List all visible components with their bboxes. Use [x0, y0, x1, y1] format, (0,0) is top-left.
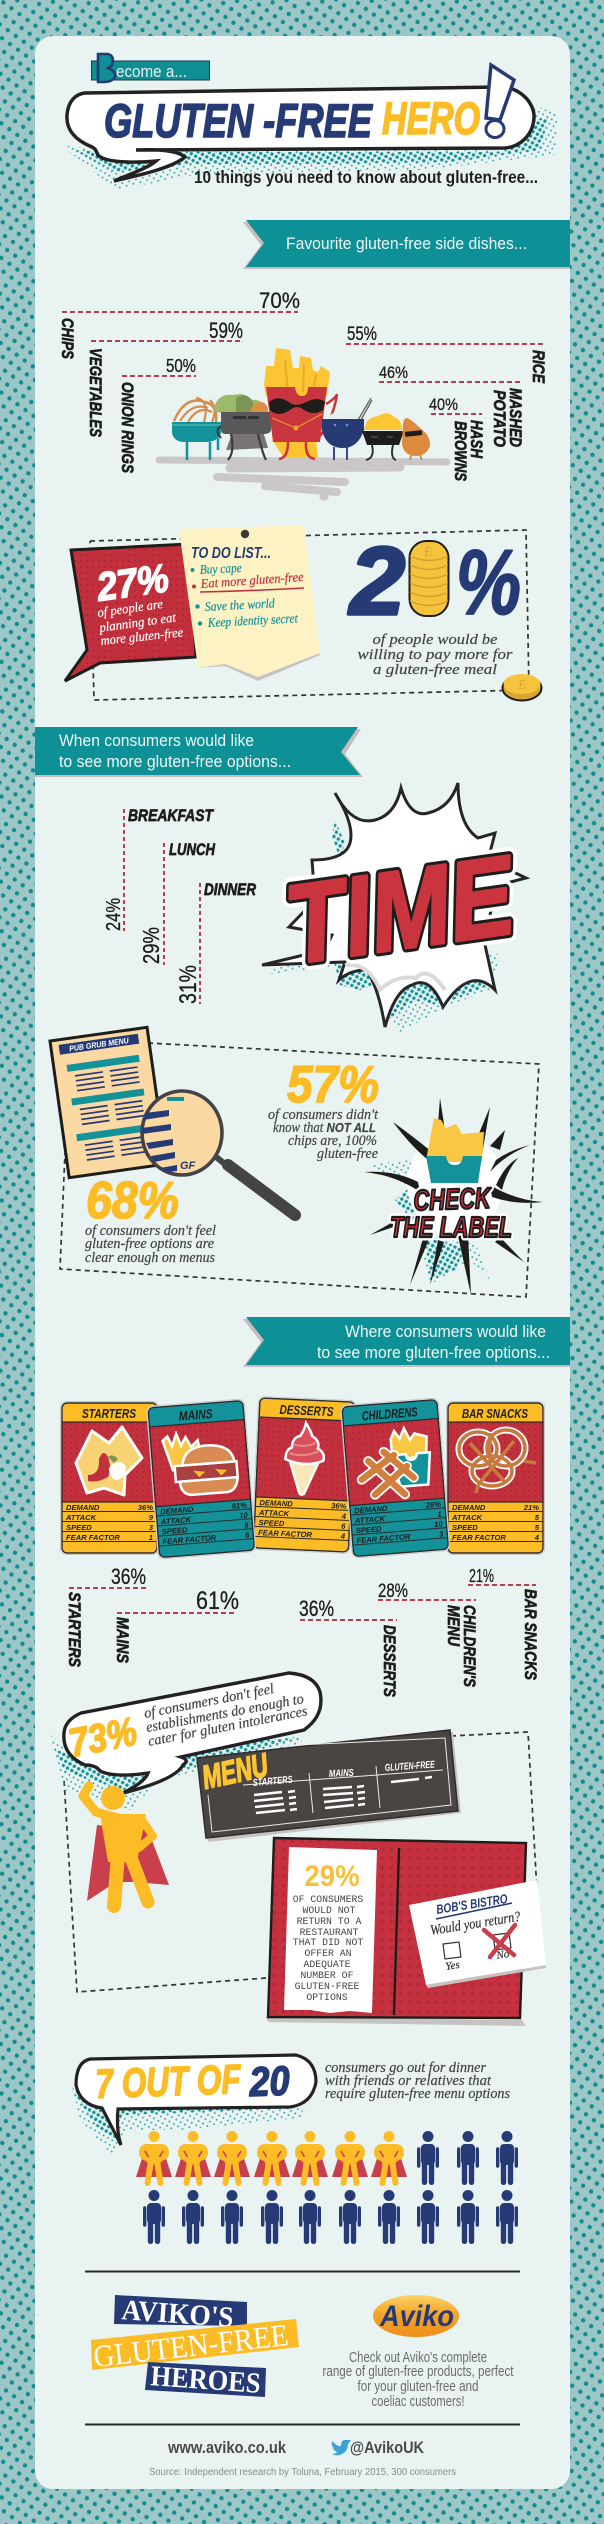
stat: 57 percent: of consumers didn't	[268, 1107, 379, 1123]
header: become a	[92, 54, 210, 82]
card: bar snacks: 21%	[523, 1503, 539, 1512]
card: mains: FEAR FACTOR	[162, 1533, 217, 1546]
chart: restaurant menus right: BAR SNACKS	[521, 1589, 540, 1681]
card: mains: 6	[245, 1530, 250, 1540]
chart: meal times: 29%	[138, 927, 164, 964]
chart: restaurant menus right: DESSERTS	[380, 1625, 399, 1698]
label: check the label: CHECK	[413, 1183, 493, 1217]
label: check the label	[390, 1183, 512, 1244]
comic burst: time	[262, 783, 526, 1032]
card: starters: STARTERS	[82, 1406, 136, 1421]
icon: chips hero character	[264, 348, 337, 459]
ribbon: where consumers: Where consumers would like	[345, 1322, 546, 1341]
27 percent text: more gluten-free	[100, 624, 184, 648]
chart: side dishes right: BROWNS	[451, 421, 470, 482]
chart: restaurant menus left: STARTERS	[65, 1592, 84, 1668]
receipt: WOULD NOT	[303, 1905, 356, 1916]
card: mains: ATTACK	[160, 1515, 192, 1526]
chart: side dishes left: VEGETABLES	[86, 348, 105, 438]
exclamation mark	[486, 65, 514, 138]
chart: restaurant menus left: 61%	[196, 1587, 239, 1615]
chart: side dishes right: 46%	[379, 363, 408, 382]
card: mains: 5	[244, 1520, 250, 1530]
icon: hash brown character	[402, 418, 430, 460]
title text: hero: HERO	[382, 93, 480, 144]
card: childrens: 3	[439, 1529, 444, 1539]
chart: meal times: LUNCH	[169, 840, 216, 859]
card: childrens: 10	[434, 1519, 444, 1529]
text: 20 percent caption	[358, 632, 513, 678]
receipt: OFFER AN	[304, 1948, 352, 1959]
chart: restaurant menus right: 36%	[299, 1596, 334, 1621]
chart: side dishes left: 59%	[209, 318, 243, 343]
twitter handle: @AvikoUK	[350, 2438, 425, 2457]
27 percent text: of people are	[96, 596, 164, 620]
dashed box: menus	[60, 1043, 539, 1297]
chart: meal times: 31%	[175, 965, 202, 1004]
chart: side dishes left: ONION RINGS	[118, 382, 137, 474]
card: starters: ATTACK	[65, 1513, 97, 1522]
icon: magnifying glass	[142, 1091, 295, 1215]
word: TIME: TIME	[278, 832, 524, 988]
card: bar snacks: SPEED	[452, 1523, 478, 1532]
logo: Aviko: Aviko	[379, 2300, 454, 2333]
chalkboard menu: STARTERS	[252, 1775, 293, 1789]
stat: 20 percent with coin stack: %	[456, 532, 521, 634]
chart: meal times: DINNER	[204, 880, 257, 899]
ribbon: when consumers: to see more gluten-free options...	[59, 752, 291, 771]
speech bubble: 7 out of 20: 20	[248, 2058, 290, 2105]
chart: side dishes right: MASHED	[506, 388, 525, 447]
red booklet	[266, 1838, 546, 2026]
comment card: Bob's Bistro: BOB'S BISTRO	[435, 1891, 509, 1917]
chart: side dishes right: HASH	[467, 420, 486, 459]
ribbon: when consumers: When consumers would like	[59, 731, 254, 750]
card: mains	[146, 1399, 256, 1559]
card: bar snacks: 5	[535, 1513, 540, 1522]
ribbon: favourite side dishes: Favourite gluten-free side dishes...	[286, 234, 527, 253]
card: starters: DEMAND	[66, 1503, 100, 1512]
text: Aviko range: coeliac customers!	[372, 2394, 464, 2410]
chart: restaurant menus right	[299, 1566, 540, 1698]
note: to do list: TO DO LIST...	[191, 545, 271, 562]
title text: GLUTEN -FREE	[104, 94, 373, 147]
label: check the label: THE LABEL	[390, 1212, 512, 1244]
stat: 57 percent: 57%	[287, 1056, 379, 1114]
stat: 57 percent	[268, 1056, 379, 1162]
card: childrens: FEAR FACTOR	[356, 1532, 411, 1545]
73 percent text: establishments do enough to	[145, 1691, 305, 1736]
icon: coin stack: £	[424, 543, 432, 559]
icon: rice bowl character	[322, 398, 372, 460]
text: 20 percent caption: of people would be	[372, 632, 498, 648]
chart: side dishes right	[346, 324, 548, 482]
chart: side dishes left: CHIPS	[58, 318, 77, 360]
stat: 68 percent	[85, 1172, 216, 1266]
title speech bubble	[60, 65, 558, 190]
card: desserts: 4	[340, 1532, 346, 1541]
icon: ice cream	[284, 1422, 325, 1495]
icon: twitter bird	[332, 2440, 351, 2455]
receipt: ADEQUATE	[303, 1959, 351, 1970]
card: bar snacks: BAR SNACKS	[462, 1406, 528, 1421]
speech bubble: 7 out of 20: 7 OUT OF	[95, 2056, 242, 2107]
card: starters: 9	[149, 1513, 154, 1522]
chart: side dishes right: 55%	[347, 324, 377, 345]
comic burst: check the label	[364, 1098, 543, 1295]
27 percent text	[96, 596, 184, 648]
source: Source: Independent research by Toluna, February 2015, 300 consumers	[149, 2466, 456, 2478]
dashed box: pay more	[90, 530, 529, 700]
text: 7 out of 20 caption: require gluten-free menu options	[325, 2086, 510, 2102]
27 percent text: planning to eat	[97, 609, 177, 635]
note: to do list: Buy cape	[199, 560, 242, 577]
receipt: GLUTEN-FREE	[295, 1981, 359, 1992]
stat: 68 percent: gluten-free options are	[85, 1236, 215, 1252]
receipt: 29%	[304, 1860, 360, 1893]
chart: side dishes left: 70%	[259, 288, 300, 313]
note: to do list: Keep identity secret	[206, 610, 298, 630]
icon: pub grub menu: PUB GRUB MENU	[69, 1036, 130, 1053]
icon: fries box	[426, 1118, 484, 1183]
logo: Aviko's gluten-free heroes: HEROES	[150, 2360, 262, 2400]
chart: meal times	[103, 806, 257, 1004]
receipt: OPTIONS	[306, 1992, 348, 2003]
card: mains: DEMAND	[160, 1505, 194, 1516]
card: desserts: FEAR FACTOR	[258, 1528, 313, 1539]
card: bar snacks: 4	[534, 1533, 540, 1542]
icon: vegetables character	[214, 394, 271, 460]
card: starters: 36%	[138, 1503, 153, 1512]
chart: side dishes left	[58, 288, 300, 474]
receipt: RETURN TO A	[297, 1916, 361, 1927]
text: Aviko range: for your gluten-free and	[358, 2379, 478, 2395]
ground shadow	[159, 460, 447, 497]
comment card: Bob's Bistro: No	[495, 1948, 511, 1962]
speech bubble: 73 percent	[50, 1673, 321, 1810]
icon: waffle and fries	[358, 1426, 433, 1498]
73 percent text: of consumers don't feel	[143, 1681, 275, 1722]
text: 7 out of 20 caption	[325, 2060, 510, 2102]
text: Aviko range: Check out Aviko's complete	[349, 2350, 487, 2366]
card: desserts: 4	[340, 1512, 347, 1521]
icon: coin stack	[410, 541, 448, 616]
card: childrens: ATTACK	[354, 1514, 386, 1525]
chart: side dishes right: RICE	[529, 350, 548, 384]
text: 7 out of 20 caption: consumers go out for dinner	[325, 2060, 486, 2076]
chart: meal times: BREAKFAST	[128, 806, 214, 825]
ribbon: when consumers	[35, 727, 363, 777]
dashed box: establishments	[64, 1732, 539, 1992]
card: desserts: DEMAND	[259, 1498, 293, 1509]
card: starters: 3	[149, 1523, 154, 1532]
card: childrens: 1	[437, 1510, 442, 1519]
comment card: Bob's Bistro: Yes	[445, 1959, 461, 1973]
icon: nachos	[76, 1427, 142, 1495]
speech bubble: 7 out of 20	[72, 2055, 316, 2155]
73 percent text	[143, 1681, 309, 1750]
card: bar snacks: ATTACK	[451, 1513, 483, 1522]
receipt	[284, 1847, 377, 2013]
stat: 68 percent: of consumers don't feel	[85, 1223, 216, 1239]
card: childrens: DEMAND	[354, 1504, 388, 1515]
chalkboard menu: GLUTEN-FREE	[384, 1760, 435, 1774]
logo: Aviko's gluten-free heroes: AVIKO'S	[121, 2294, 235, 2334]
27 percent number: 27%	[93, 556, 172, 610]
card: desserts: 6	[341, 1522, 346, 1531]
card: starters: FEAR FACTOR	[66, 1533, 120, 1542]
stat: 57 percent: gluten-free	[317, 1146, 379, 1162]
note: to do list	[179, 525, 320, 681]
card: mains: SPEED	[161, 1525, 188, 1536]
receipt: THAT DID NOT	[293, 1937, 363, 1948]
chart: side dishes right: 40%	[429, 395, 458, 414]
chart: restaurant menus right: 28%	[378, 1581, 408, 1602]
73 percent text: cater for gluten intolerances	[147, 1703, 309, 1750]
card: mains: 61%	[231, 1501, 248, 1511]
chart: side dishes left: 50%	[166, 356, 196, 376]
chart: meal times: 24%	[103, 898, 125, 931]
icon: coin	[502, 674, 542, 700]
card: bar snacks: 5	[535, 1523, 540, 1532]
icon: pretzels	[459, 1430, 536, 1493]
card: desserts	[252, 1396, 356, 1554]
label: check the label: CHECK	[413, 1183, 493, 1217]
receipt: NUMBER OF	[301, 1970, 354, 1981]
word: menu: MENU	[199, 1746, 272, 1796]
comment card: Bob's Bistro	[409, 1880, 546, 1988]
subtitle: 10 things you need to know about gluten-free...	[194, 167, 538, 187]
card: desserts: 36%	[331, 1501, 347, 1511]
card: bar snacks: FEAR FACTOR	[452, 1533, 506, 1542]
chalkboard menu: MAINS	[329, 1768, 354, 1780]
pictogram: 7 of 20 people	[136, 2131, 516, 2244]
card: starters: 1	[149, 1533, 153, 1542]
card: bar snacks	[446, 1402, 544, 1554]
card: desserts: ATTACK	[258, 1508, 290, 1518]
chart: restaurant menus right: CHILDREN'S	[460, 1605, 479, 1688]
stat: 68 percent: 68%	[86, 1172, 179, 1230]
note: to do list: Save the world	[204, 595, 276, 614]
card: desserts: DESSERTS	[279, 1402, 334, 1419]
chalkboard menu	[197, 1730, 461, 1842]
comment card: Bob's Bistro: Would you return?	[429, 1909, 522, 1939]
stat: 57 percent: know that NOT ALL	[273, 1120, 376, 1136]
chart: side dishes right: POTATO	[490, 390, 509, 447]
chart: restaurant menus right: 21%	[469, 1566, 494, 1586]
stat: 20 percent with coin stack	[348, 528, 521, 635]
card: childrens	[340, 1398, 450, 1558]
receipt: RESTAURANT	[300, 1927, 359, 1938]
card: childrens: SPEED	[355, 1524, 382, 1535]
icon: magnifying glass: GF	[180, 1160, 196, 1172]
logo: Aviko's gluten-free heroes	[91, 2294, 299, 2400]
chart: restaurant menus left: 36%	[111, 1564, 146, 1589]
chart: restaurant menus right: MENU	[444, 1605, 463, 1647]
73 percent number: 73%	[65, 1710, 140, 1766]
icon: onion rings character	[172, 398, 221, 460]
card: bar snacks: DEMAND	[452, 1503, 486, 1512]
chart: restaurant menus left	[65, 1564, 239, 1668]
ribbon: where consumers	[243, 1317, 570, 1367]
website: www.aviko.co.uk	[167, 2438, 286, 2457]
ribbon: favourite side dishes	[243, 220, 570, 269]
note: to do list: Eat more gluten-free	[199, 569, 304, 591]
stat: 20 percent with coin stack: 2	[348, 528, 405, 635]
header: become a: ecome a...	[116, 62, 187, 81]
word: TIME: TIME	[278, 832, 524, 988]
text: 20 percent caption: a gluten-free meal	[373, 662, 497, 678]
stat: 68 percent: clear enough on menus	[85, 1250, 215, 1266]
text: 7 out of 20 caption: with friends or relatives that	[325, 2073, 492, 2089]
callout: 27 percent	[65, 544, 196, 681]
icon: pub grub menu	[50, 1027, 166, 1178]
card: childrens: 28%	[424, 1500, 442, 1510]
icon: mashed potato character	[362, 413, 404, 460]
card: desserts: SPEED	[258, 1518, 285, 1528]
logo: Aviko's gluten-free heroes: GLUTEN-FREE	[91, 2317, 290, 2374]
card: mains: MAINS	[178, 1406, 213, 1424]
card: starters	[60, 1402, 158, 1554]
icon: hero with cape	[83, 1786, 169, 1906]
label: check the label: THE LABEL	[390, 1212, 512, 1244]
card: starters: SPEED	[66, 1523, 92, 1532]
text: 20 percent caption: willing to pay more for	[358, 647, 513, 663]
card: mains: 10	[239, 1510, 249, 1520]
card: childrens: CHILDRENS	[361, 1404, 418, 1423]
word: TIME: TIME	[278, 832, 524, 988]
icon: coin: £	[518, 677, 526, 692]
icon: burger and fries	[162, 1429, 239, 1497]
ribbon: where consumers: to see more gluten-free options...	[317, 1343, 550, 1362]
text: Aviko range: range of gluten-free products, perfect	[322, 2364, 514, 2380]
text: Aviko range	[322, 2350, 514, 2410]
chart: restaurant menus left: MAINS	[113, 1617, 132, 1664]
stat: 57 percent: chips are, 100%	[288, 1133, 377, 1149]
receipt: OF CONSUMERS	[293, 1894, 363, 1905]
